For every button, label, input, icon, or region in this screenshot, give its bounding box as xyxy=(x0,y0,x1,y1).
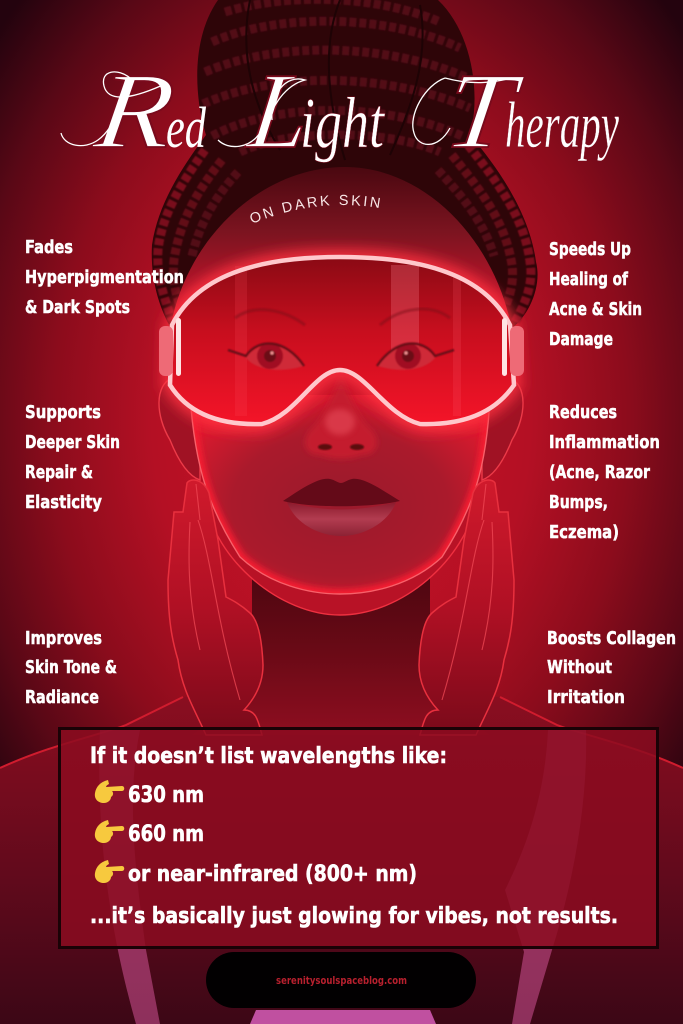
benefit: speeds up healing xyxy=(549,239,642,350)
nose xyxy=(305,375,377,459)
ears xyxy=(159,378,523,480)
forehead xyxy=(170,167,512,330)
visor glow xyxy=(170,257,514,424)
title: ed xyxy=(166,95,207,160)
icon: pointing hand 630 xyxy=(95,780,124,803)
benefit: reduces inflammation xyxy=(549,402,660,543)
benefit: improves skin tone xyxy=(25,628,117,708)
panel: wavelengths callout: If it doesn’t list wavelengths like: xyxy=(90,744,447,769)
website pill: serenitysoulspaceblog.com xyxy=(276,974,407,987)
icon: pointing hand near-infrared xyxy=(95,860,124,883)
benefit: reduces inflammation: (Acne, Razor xyxy=(549,462,650,483)
benefit: fades hyperpigmentation xyxy=(25,237,184,318)
neck xyxy=(192,570,490,735)
benefit: boosts collagen: Without xyxy=(547,657,612,678)
benefit: supports deeper skin repair xyxy=(25,402,120,513)
face xyxy=(185,380,495,594)
shoulder outline xyxy=(0,697,683,768)
shoulders and chest xyxy=(0,690,683,1024)
benefit: supports deeper skin repair: Supports xyxy=(25,402,101,423)
benefit: improves skin tone: Skin Tone & xyxy=(25,657,117,678)
benefit: reduces inflammation: Eczema) xyxy=(549,522,619,543)
title: ight xyxy=(300,83,385,163)
panel: wavelengths callout: or near-infrared (800+ nm) xyxy=(128,862,417,887)
benefit: speeds up healing: Acne & Skin xyxy=(549,299,642,320)
benefit: speeds up healing: Healing of xyxy=(549,269,628,290)
title: T xyxy=(439,51,529,171)
benefit: fades hyperpigmentation: & Dark Spots xyxy=(25,297,130,318)
benefit: supports deeper skin repair: Elasticity xyxy=(25,492,102,513)
lens reflections xyxy=(235,265,461,416)
brows xyxy=(235,309,450,325)
lips xyxy=(283,479,400,536)
title: L xyxy=(241,51,317,171)
benefit: boosts collagen xyxy=(547,628,676,708)
tank top xyxy=(99,730,586,1024)
benefit: supports deeper skin repair: Repair & xyxy=(25,462,93,483)
icon: pointing hand 660 xyxy=(95,820,124,843)
top garment hem xyxy=(250,1010,436,1024)
benefit: improves skin tone: Improves xyxy=(25,628,102,649)
hair and braided bun xyxy=(152,0,538,330)
benefit: reduces inflammation: Bumps, xyxy=(549,492,608,513)
benefit: supports deeper skin repair: Deeper Skin xyxy=(25,432,120,453)
subtitle: on dark skin: ON DARK SKIN xyxy=(250,194,380,222)
visor lens xyxy=(170,257,514,424)
benefit: reduces inflammation: Reduces xyxy=(549,402,617,423)
benefit: fades hyperpigmentation: Fades xyxy=(25,237,73,258)
benefit: boosts collagen: Irritation xyxy=(547,687,625,708)
benefit: improves skin tone: Radiance xyxy=(25,687,99,708)
panel: wavelengths callout xyxy=(60,728,658,948)
panel: wavelengths callout: 630 nm xyxy=(128,783,204,808)
title: herapy xyxy=(505,89,619,162)
left eye xyxy=(228,343,304,370)
right eye xyxy=(377,343,454,370)
website pill xyxy=(206,952,476,1008)
title xyxy=(61,51,619,171)
benefit: speeds up healing: Speeds Up xyxy=(549,239,631,260)
side pods xyxy=(159,318,524,376)
benefit: fades hyperpigmentation: Hyperpigmentation xyxy=(25,267,184,288)
title: R xyxy=(87,51,181,171)
hands xyxy=(168,480,514,735)
jaw band xyxy=(205,500,477,615)
panel: wavelengths callout: 660 nm xyxy=(128,822,204,847)
benefit: speeds up healing: Damage xyxy=(549,329,613,350)
visor neon frame xyxy=(170,257,514,424)
benefit: reduces inflammation: Inflammation xyxy=(549,432,660,453)
